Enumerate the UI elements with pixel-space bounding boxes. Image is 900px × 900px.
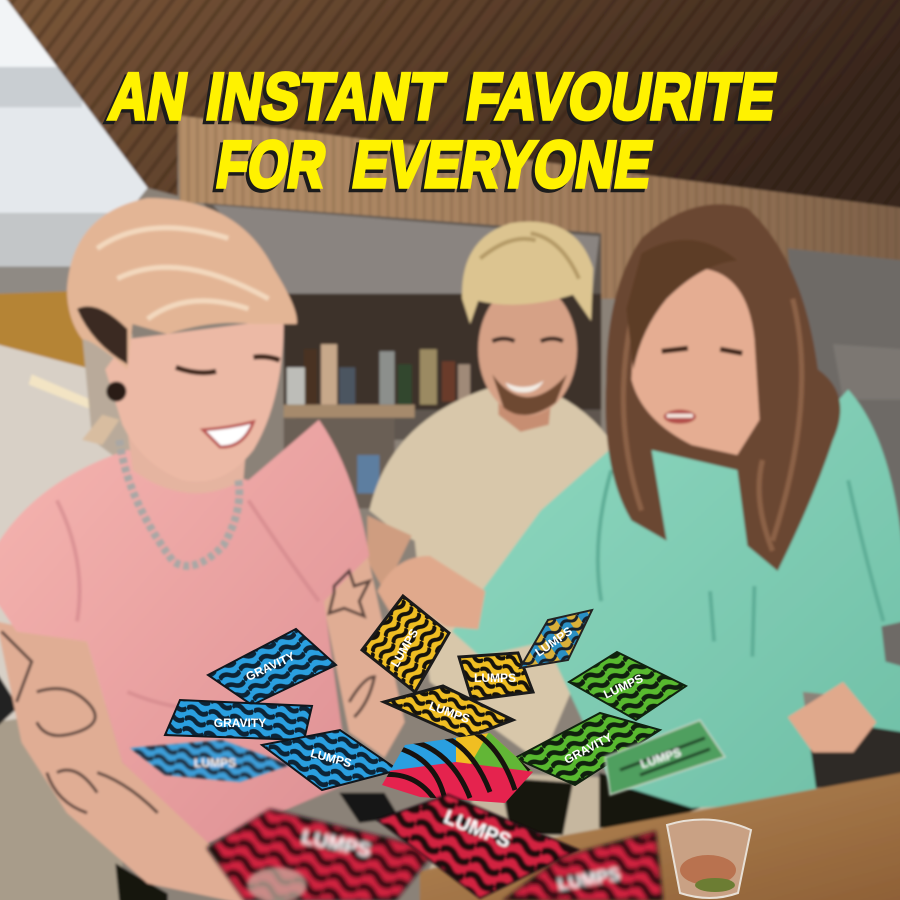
card: yellow small: LUMPS — [474, 671, 516, 685]
right grey cabinets — [788, 248, 900, 788]
floor and trousers under the table edge — [115, 773, 722, 900]
left woman face — [105, 319, 284, 482]
card: red middle: LUMPS — [441, 806, 514, 853]
card: yellow held: LUMPS — [388, 626, 421, 670]
card: blue low left: LUMPS — [194, 756, 236, 770]
headline shadow: FOR — [209, 131, 328, 205]
left woman shirt — [0, 420, 369, 843]
card: multicolour — [520, 610, 592, 668]
floating game cards — [130, 596, 725, 900]
hoodie shading and strings — [598, 420, 883, 657]
headline shadow: FAVOURITE — [459, 63, 778, 137]
card: green right — [605, 720, 725, 795]
left woman neck — [127, 420, 248, 493]
man neck — [498, 384, 553, 432]
card: yellow small — [459, 653, 533, 700]
card: blue low right — [262, 730, 398, 790]
person: woman on the right — [377, 204, 900, 808]
small glass bottom left — [247, 867, 307, 900]
headline text: INSTANT — [202, 60, 449, 134]
left woman black jacket hint — [0, 672, 19, 727]
man arm — [367, 516, 412, 591]
left woman hair — [67, 198, 297, 369]
table — [420, 773, 900, 900]
headline shadow: AN — [102, 63, 189, 137]
card: green top — [569, 652, 686, 720]
right woman hair back — [606, 204, 840, 571]
headline shadow: EVERYONE — [345, 131, 654, 205]
card: blue middle: GRAVITY — [214, 716, 266, 730]
card: green top: LUMPS — [601, 671, 645, 702]
right woman hand on hip — [788, 682, 876, 752]
right woman hoodie — [452, 390, 900, 808]
wooden ceiling — [4, 0, 900, 208]
left woman earring — [106, 381, 126, 402]
right woman mouth — [664, 410, 696, 424]
drinking glass — [667, 820, 751, 898]
headline text: FAVOURITE — [462, 60, 781, 134]
headline shadow: INSTANT — [199, 63, 446, 137]
left woman chain necklace — [119, 440, 239, 566]
left woman arm tattoos — [0, 621, 248, 900]
headline text: AN — [105, 60, 192, 134]
card: blue low right: LUMPS — [309, 746, 353, 770]
tattoos — [1, 571, 374, 813]
right woman hair front strand — [626, 240, 737, 369]
man t-shirt — [369, 388, 613, 762]
left woman mouth — [203, 422, 253, 447]
man face — [478, 283, 577, 416]
headline shadow — [102, 63, 778, 205]
card: yellow flat: LUMPS — [427, 698, 471, 726]
card: red middle — [378, 795, 578, 898]
card: red bottom: LUMPS — [556, 864, 622, 894]
headline text — [105, 60, 781, 202]
wooden slatted wall — [178, 115, 900, 299]
right woman eyes — [662, 348, 742, 353]
right woman face — [631, 269, 759, 455]
headline text: EVERYONE — [348, 128, 657, 202]
card: green wide — [515, 713, 660, 785]
card: red left: LUMPS — [300, 826, 373, 862]
person: man in the middle — [367, 222, 613, 762]
shirt folds — [57, 500, 319, 710]
card: blue top — [208, 629, 336, 705]
card: yellow held — [362, 596, 449, 692]
card: blue top: GRAVITY — [244, 649, 297, 684]
left woman eyes — [176, 357, 280, 373]
man eyes and smile — [492, 339, 563, 341]
card: green wide: GRAVITY — [562, 730, 615, 767]
card: red left — [208, 810, 435, 900]
card: red bottom — [505, 832, 662, 900]
person: woman on the left — [0, 198, 405, 900]
card: blue low left — [130, 740, 290, 782]
card: multicolour: LUMPS — [532, 624, 575, 660]
back bar alcove with bottles — [203, 203, 601, 508]
card: yellow flat — [384, 686, 513, 738]
right woman hand holding card — [377, 556, 485, 629]
man hair — [462, 222, 593, 324]
card: rainbow — [382, 733, 533, 803]
headline — [102, 60, 781, 205]
card: green right: LUMPS — [639, 745, 683, 771]
card: blue middle — [165, 700, 312, 740]
headline text: FOR — [212, 128, 331, 202]
